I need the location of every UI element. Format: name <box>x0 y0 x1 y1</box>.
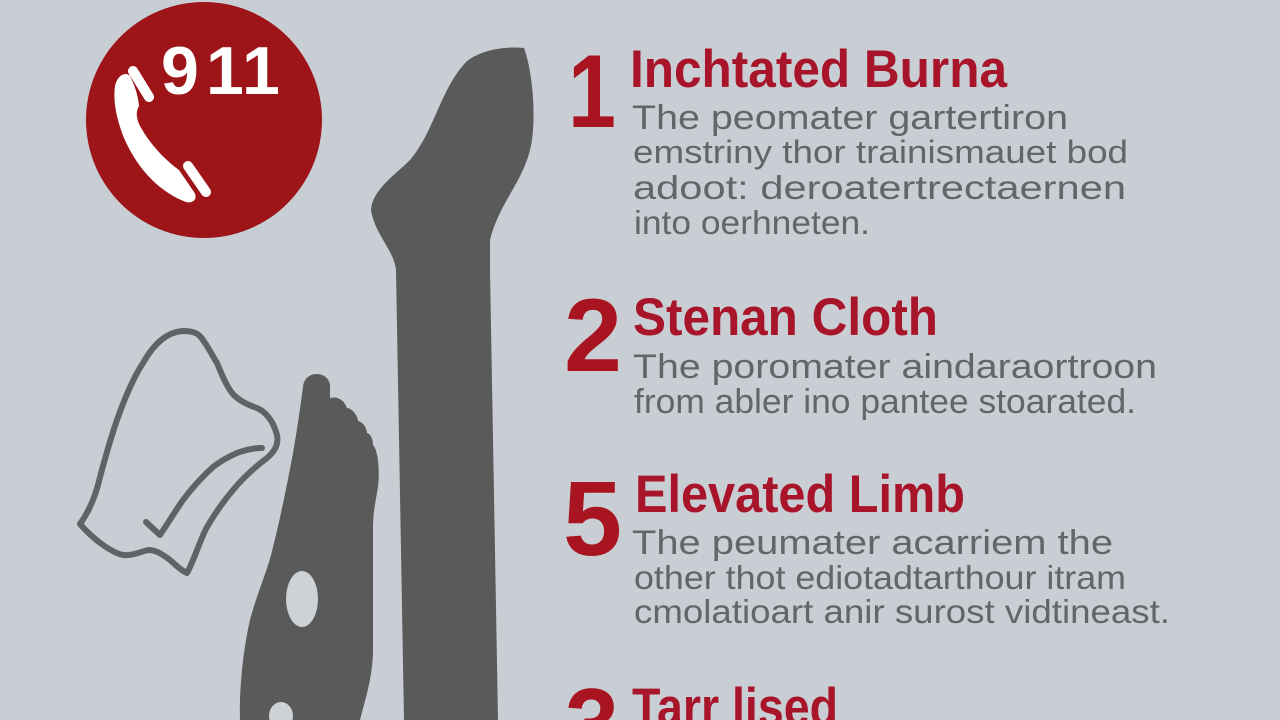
text 2: from abler ino pantee stoarated. <box>634 383 1136 421</box>
text 1: into oerhneten. <box>634 204 870 241</box>
number 1: 1 <box>568 34 616 150</box>
text 2: The poromater aindaraortroon <box>633 348 1157 386</box>
heading 5: Elevated Limb <box>635 465 965 524</box>
step 2: Stenan Cloth <box>564 278 1157 421</box>
text 5: other thot ediotadtarthour itram <box>634 559 1126 596</box>
text 5 <box>632 524 1170 630</box>
icon: 911 phone badge <box>86 2 322 238</box>
step 3: Tarr lised <box>565 668 838 720</box>
text 1: The peomater gartertiron <box>632 99 1068 137</box>
heading 1: Inchtated Burna <box>630 40 1007 99</box>
text 2 <box>633 348 1157 421</box>
text 1: emstriny thor trainismauet bod <box>633 134 1128 170</box>
text 5: The peumater acarriem the <box>632 524 1113 562</box>
heading 2: Stenan Cloth <box>633 288 938 347</box>
number 5: 5 <box>563 460 622 578</box>
number 2: 2 <box>564 278 622 394</box>
icon: cloth outline <box>80 331 277 573</box>
text 1 <box>632 99 1128 241</box>
icon: foot silhouette <box>240 374 379 720</box>
step 1: Inchtated Burna <box>568 34 1128 241</box>
step 5: Elevated Limb <box>563 460 1170 630</box>
icon: 911 phone badge: 911 <box>161 33 280 109</box>
icon: limb silhouette <box>371 48 534 720</box>
text 1: adoot: deroatertrectaernen <box>633 169 1126 206</box>
text 5: cmolatioart anir surost vidtineast. <box>634 593 1170 630</box>
